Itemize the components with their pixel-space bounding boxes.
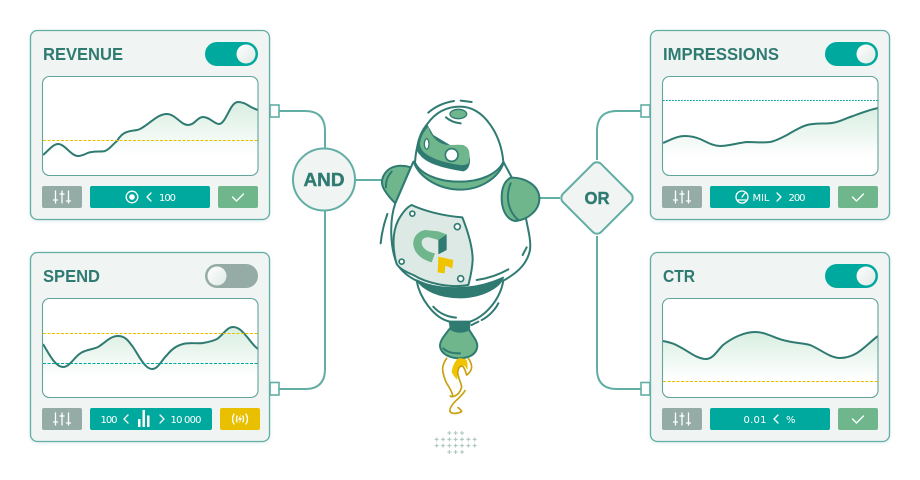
button: settings <box>42 408 82 430</box>
chest plate <box>393 205 473 286</box>
panel: revenue <box>30 30 270 220</box>
panel: ctr <box>650 252 890 442</box>
chart: spend <box>42 298 258 398</box>
robot body <box>391 162 530 322</box>
robot belt <box>417 277 503 298</box>
button: impressions condition: 200 <box>788 193 806 204</box>
button: check <box>838 408 878 430</box>
robot accent lines <box>381 101 527 325</box>
toggle: off <box>205 264 258 288</box>
button: spend condition: 100 <box>100 415 118 426</box>
toggle: on <box>825 264 878 288</box>
robot thruster <box>440 322 477 358</box>
button: settings <box>662 186 702 208</box>
button: ctr condition: 0.01 <box>744 415 766 426</box>
button: settings <box>662 408 702 430</box>
AND gate: AND <box>304 170 344 190</box>
panel: impressions <box>650 30 890 220</box>
button: revenue condition: 100 <box>159 193 176 204</box>
connectors: AND wires <box>270 105 382 395</box>
OR gate <box>559 160 635 236</box>
button: revenue condition <box>90 186 210 208</box>
chart: revenue <box>42 76 258 176</box>
button: settings <box>42 186 82 208</box>
heading: impressions: IMPRESSIONS <box>663 44 779 64</box>
button: warning signal <box>220 408 260 430</box>
robot right arm <box>502 178 539 221</box>
panel: spend <box>30 252 270 442</box>
button: check <box>218 186 258 208</box>
button: check <box>838 186 878 208</box>
robot <box>381 101 539 454</box>
logo <box>413 230 453 273</box>
toggle: on <box>205 42 258 66</box>
robot head <box>414 107 504 190</box>
AND gate <box>293 148 355 210</box>
button: spend condition <box>90 408 212 430</box>
button: impressions condition <box>710 186 830 208</box>
button: ctr condition <box>710 408 830 430</box>
flame <box>443 358 472 413</box>
toggle: on <box>825 42 878 66</box>
button: ctr condition: % <box>786 415 796 426</box>
chart: ctr <box>662 298 878 398</box>
chart: impressions <box>662 76 878 176</box>
heading: ctr: CTR <box>663 266 695 286</box>
OR gate: OR <box>584 188 610 208</box>
button: impressions condition: MIL <box>752 193 770 204</box>
connectors: OR wires <box>540 105 650 395</box>
button: spend condition: 10 000 <box>170 415 202 426</box>
heading: spend: SPEND <box>43 266 100 286</box>
plus dot pattern <box>435 431 477 454</box>
robot left arm <box>382 166 411 203</box>
heading: revenue: REVENUE <box>43 44 123 64</box>
